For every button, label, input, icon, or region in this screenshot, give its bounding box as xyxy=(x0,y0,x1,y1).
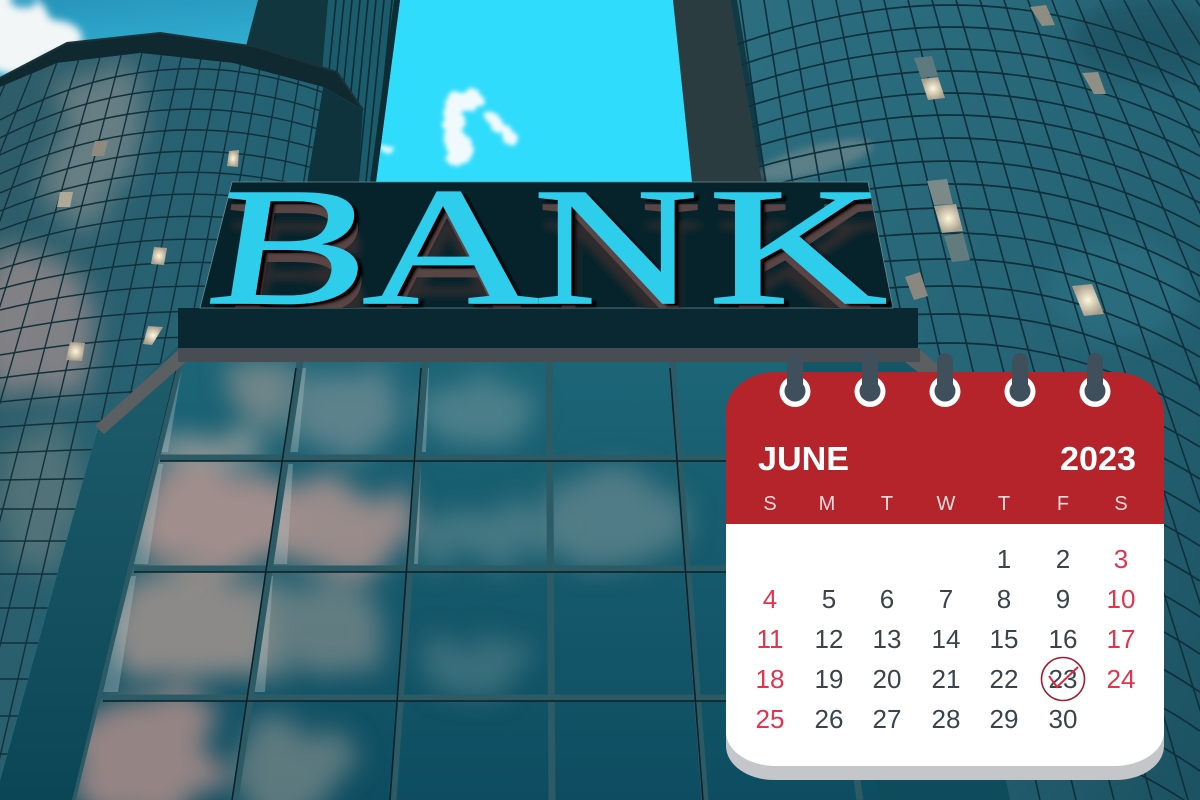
calendar day numbers: 9 xyxy=(1056,584,1070,614)
left back tower xyxy=(245,0,400,182)
calendar day numbers: 18 xyxy=(756,664,784,694)
calendar day numbers: 26 xyxy=(815,704,843,734)
calendar day numbers: 5 xyxy=(822,584,836,614)
calendar day numbers: 27 xyxy=(873,704,901,734)
weekday headers: M xyxy=(819,493,835,515)
calendar day numbers: 30 xyxy=(1049,704,1077,734)
cloud reflections in glass xyxy=(68,351,685,800)
lit windows on left tower xyxy=(57,141,239,361)
calendar day numbers: 19 xyxy=(815,664,843,694)
calendar day numbers: 17 xyxy=(1107,624,1135,654)
weekday headers: W xyxy=(937,493,956,515)
sign lettering: A xyxy=(362,154,539,340)
calendar day numbers: 29 xyxy=(990,704,1018,734)
month title: JUNE xyxy=(758,440,849,477)
weekday headers: T xyxy=(881,493,893,515)
calendar day numbers: 21 xyxy=(932,664,960,694)
sign lettering xyxy=(210,191,892,308)
year title: 2023 xyxy=(1060,440,1136,477)
sloped roof beams xyxy=(95,348,950,434)
calendar xyxy=(726,353,1164,780)
right back tower xyxy=(673,0,765,182)
cloud in central sky xyxy=(380,89,519,166)
calendar day numbers: 23 xyxy=(1049,664,1077,694)
circled and checked date xyxy=(1042,658,1084,700)
weekday headers: S xyxy=(1114,493,1128,515)
teal wedge under tower edge xyxy=(92,308,200,430)
bank sign xyxy=(200,182,894,308)
calendar day numbers: 11 xyxy=(756,624,784,654)
calendar day numbers: 10 xyxy=(1107,584,1135,614)
weekday headers: S xyxy=(763,493,777,515)
calendar day numbers: 20 xyxy=(873,664,901,694)
calendar day numbers: 14 xyxy=(932,624,960,654)
weekday headers xyxy=(763,493,1128,515)
right curved glass tower xyxy=(725,0,1200,800)
sign lettering: N xyxy=(533,154,698,340)
left curved glass tower xyxy=(0,40,340,800)
binder rings xyxy=(780,353,1110,407)
sign base slab and ledge xyxy=(178,308,920,362)
calendar day numbers: 25 xyxy=(756,704,784,734)
calendar day numbers: 12 xyxy=(815,624,843,654)
glass facade xyxy=(68,351,1010,800)
calendar day numbers: 13 xyxy=(873,624,901,654)
calendar day numbers: 4 xyxy=(763,584,777,614)
calendar day numbers: 24 xyxy=(1107,664,1135,694)
calendar day numbers: 7 xyxy=(939,584,953,614)
calendar day numbers: 15 xyxy=(990,624,1018,654)
calendar red header xyxy=(726,372,1164,524)
calendar day numbers: 16 xyxy=(1049,624,1077,654)
window mullions xyxy=(70,362,860,800)
lit windows on right tower xyxy=(905,5,1106,316)
calendar day numbers: 28 xyxy=(932,704,960,734)
calendar day numbers: 6 xyxy=(880,584,894,614)
calendar day numbers: 2 xyxy=(1056,544,1070,574)
light strips on panes xyxy=(103,368,429,692)
left pier xyxy=(0,360,178,800)
calendar day numbers: 3 xyxy=(1114,544,1128,574)
calendar day numbers xyxy=(756,544,1135,734)
calendar day numbers: 8 xyxy=(997,584,1011,614)
sign lettering: K xyxy=(708,153,888,339)
weekday headers: F xyxy=(1057,493,1069,515)
calendar day numbers: 22 xyxy=(990,664,1018,694)
right pier xyxy=(795,360,1010,800)
left tower roof and side xyxy=(0,33,363,182)
sign lettering: B xyxy=(198,153,387,339)
calendar page shadow edge xyxy=(726,400,1164,780)
weekday headers: T xyxy=(998,493,1010,515)
calendar white page xyxy=(726,520,1164,766)
calendar day numbers: 1 xyxy=(997,544,1011,574)
